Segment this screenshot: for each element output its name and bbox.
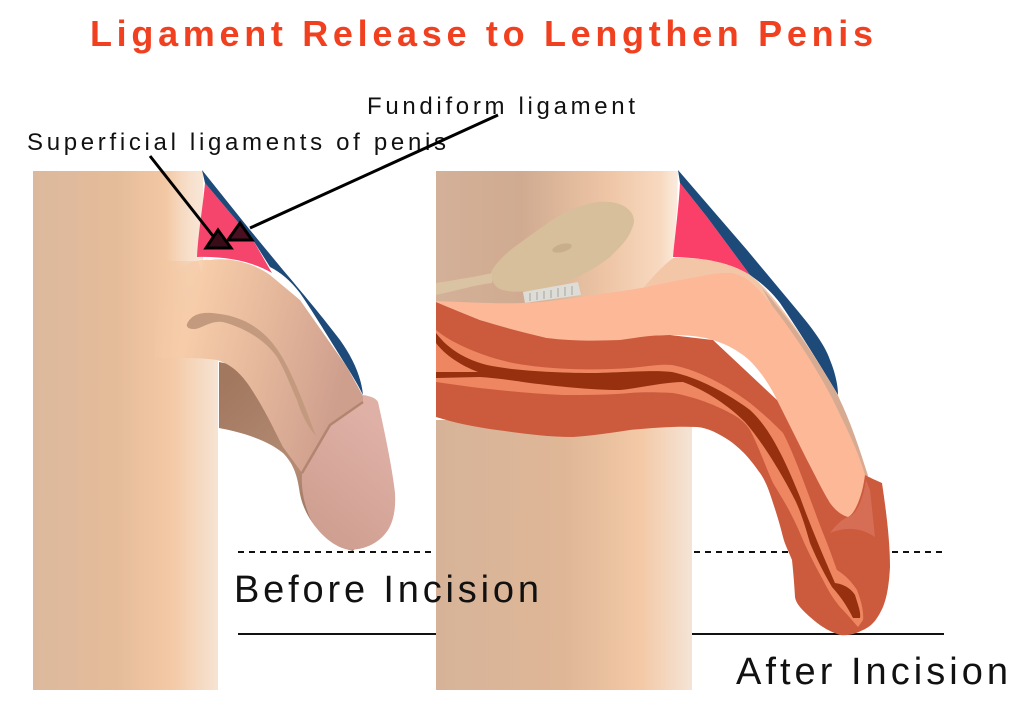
illustration: after incision: [436, 170, 890, 690]
implant disc: [491, 202, 634, 292]
torso: after: [436, 171, 692, 690]
ligament fat: after: [673, 183, 750, 275]
ligament fat: before: [197, 183, 272, 273]
crease: before: [187, 313, 316, 436]
guide lines: before and after length: [238, 552, 944, 634]
salmon tissue layer: after: [436, 330, 863, 627]
corona line: before: [302, 402, 363, 473]
title: Ligament Release to Lengthen Penis: [90, 13, 873, 54]
glans: before: [302, 395, 395, 550]
outer corpus: after: [436, 302, 890, 635]
glans highlight: after: [830, 480, 875, 537]
dermis band: before: [202, 170, 363, 395]
illustration: before incision: [33, 170, 395, 690]
label: fundiform ligament: Fundiform ligament: [367, 93, 635, 120]
shaded underside: before: [219, 362, 360, 551]
label: before incision: Before Incision: [234, 569, 539, 611]
arrow: fundiform ligament: [228, 115, 498, 240]
dermis band: after: [678, 170, 838, 395]
upper shaft tissue: after: [436, 273, 865, 517]
urethra: after: [436, 333, 860, 618]
implant connector: [523, 282, 581, 303]
label: superficial ligaments: Superficial ligaments of penis: [27, 129, 446, 156]
torso: before: [33, 171, 218, 690]
skin rim: after: [762, 288, 868, 476]
upper skin band: after: [640, 258, 868, 500]
shaft: before: [155, 259, 363, 473]
implant tube: [436, 273, 492, 295]
label: after incision: After Incision: [736, 651, 1008, 693]
arrow: superficial ligaments: [150, 156, 231, 248]
